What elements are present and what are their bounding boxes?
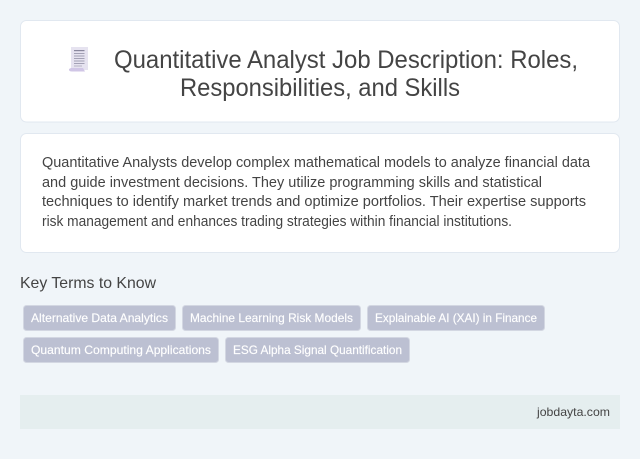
chip: alternative data analytics: Alternative Data Analytics (31, 311, 168, 325)
text block: description: Quantitative Analysts develop complex mathematical models to analyze financial data (42, 155, 591, 171)
text block: description: techniques to identify market trends and optimize portfolios. Their expertise supports (42, 194, 586, 210)
title: Responsibilities, and Skills (180, 74, 460, 102)
footer: jobdayta.com (536, 405, 610, 419)
chip: machine learning risk models: Machine Learning Risk Models (190, 311, 353, 325)
chip: quantum computing applications (24, 338, 218, 362)
text block: description (42, 155, 591, 230)
icon: document scroll (69, 47, 88, 72)
chip: quantum computing applications: Quantum Computing Applications (31, 343, 211, 357)
chips: key terms (24, 306, 544, 362)
text block: description: and guide investment decisions. They utilize programming skills and statistical (42, 175, 542, 191)
title (114, 46, 578, 102)
panel: title card (20, 20, 620, 122)
title: Quantitative Analyst Job Description: Roles, (114, 46, 578, 74)
chip: explainable AI: Explainable AI (XAI) in Finance (375, 311, 537, 325)
chip: ESG alpha signal quantification (226, 338, 410, 362)
chip: machine learning risk models (182, 306, 360, 330)
heading: key terms: Key Terms to Know (20, 275, 156, 292)
chip: explainable AI (368, 306, 544, 330)
panel: description (20, 134, 620, 252)
chip: ESG alpha signal quantification: ESG Alpha Signal Quantification (233, 343, 402, 357)
text block: description: risk management and enhances trading strategies within financial institutions. (42, 214, 512, 230)
footer (20, 395, 620, 429)
chip: alternative data analytics (24, 306, 176, 330)
